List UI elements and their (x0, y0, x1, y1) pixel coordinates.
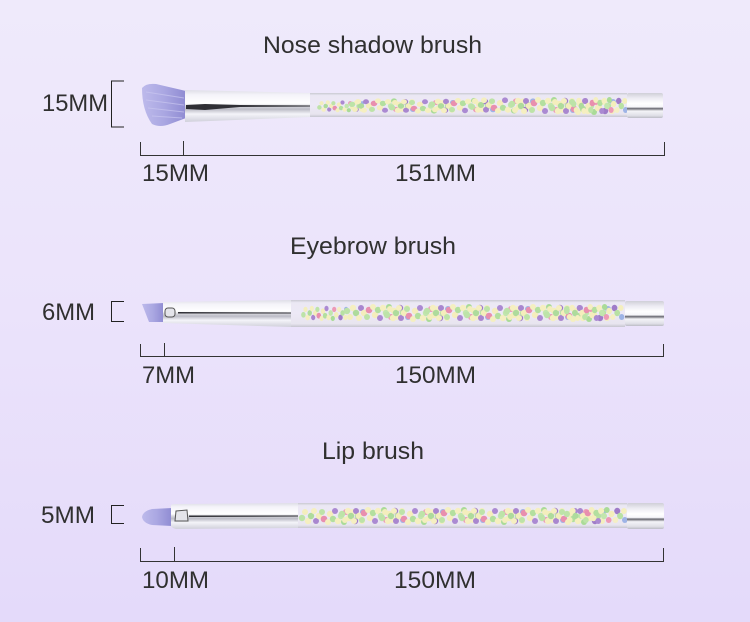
heading: eyebrow brush: Eyebrow brush (290, 233, 456, 260)
handle (310, 93, 627, 117)
brush: lip (142, 503, 664, 529)
label: 15MM length: 15MM (142, 160, 209, 187)
brush: eyebrow (142, 300, 664, 327)
label: 15MM height: 15MM (42, 90, 108, 117)
cap (627, 503, 664, 529)
brush: nose shadow (142, 84, 663, 126)
beads (301, 304, 624, 322)
dimension line: 10MM and 150MM (140, 547, 664, 562)
bracket: bristle height 5MM (112, 506, 124, 524)
handle (298, 503, 627, 528)
bristles (142, 303, 164, 322)
cap (625, 301, 664, 326)
bracket: bristle height 6MM (112, 302, 124, 322)
ferrule (163, 300, 291, 327)
bristles (142, 84, 186, 126)
heading: lip brush: Lip brush (322, 438, 424, 465)
ferrule (171, 503, 298, 529)
beads (317, 97, 628, 115)
heading: nose shadow brush: Nose shadow brush (263, 32, 482, 59)
label: 151MM length: 151MM (395, 160, 476, 187)
label: 6MM height: 6MM (42, 299, 95, 326)
label: 5MM height: 5MM (41, 502, 95, 529)
ferrule crimp (165, 308, 175, 317)
label: 150MM length: 150MM (395, 362, 476, 389)
ferrule (185, 90, 310, 122)
label: 7MM length: 7MM (142, 362, 195, 389)
beads (299, 507, 628, 525)
bracket: bristle height 15MM (112, 81, 124, 127)
dimension line: 15MM and 151MM (140, 141, 664, 156)
dimension line: 7MM and 150MM (140, 343, 664, 356)
cap (627, 93, 663, 118)
ferrule crimp (175, 510, 188, 521)
handle (291, 300, 625, 327)
label: 10MM length: 10MM (142, 567, 209, 594)
label: 150MM length: 150MM (394, 567, 476, 594)
bristles (142, 508, 172, 526)
